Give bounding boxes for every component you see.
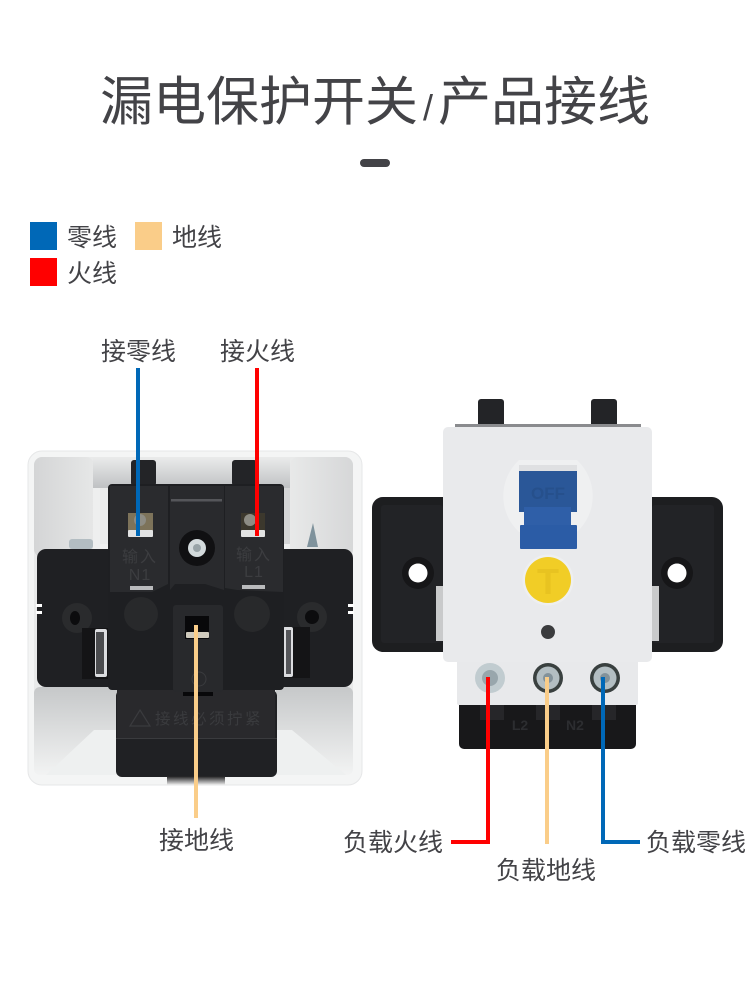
wire: load earth — [545, 677, 549, 844]
label: load earth: 负载地线 — [496, 857, 596, 885]
warning triangle — [130, 710, 150, 726]
label: connect live: 接火线 — [220, 338, 295, 366]
live input marking: 输入 — [236, 546, 272, 564]
lower black base — [459, 700, 636, 749]
bottom notch — [167, 776, 225, 785]
wire: load live — [451, 677, 488, 842]
black mounting plate — [372, 497, 723, 652]
small screw left — [69, 539, 93, 549]
screw 1 — [475, 663, 505, 693]
warning text on housing: 接线必须拧紧 — [155, 710, 263, 728]
terminal strip — [457, 658, 638, 705]
centre screw — [179, 530, 215, 566]
grey side tabs — [436, 586, 445, 641]
left mounting hole — [402, 557, 434, 589]
switch recess — [503, 460, 593, 532]
outer white plate — [28, 451, 362, 785]
lower terminal housing — [116, 690, 277, 777]
earth terminal block — [173, 605, 223, 692]
left device: socket back — [28, 451, 362, 785]
black mounting plate — [37, 549, 353, 687]
top tabs — [131, 460, 156, 486]
wire: neutral input — [136, 368, 140, 536]
neutral terminal — [128, 513, 153, 533]
base markings: L2 — [512, 717, 528, 733]
white front body — [443, 427, 652, 662]
label: connect earth: 接地线 — [159, 827, 234, 855]
title: 漏电保护开关 — [100, 73, 418, 132]
T marking: T — [537, 561, 559, 602]
side slots — [82, 628, 109, 679]
title: 产品接线 — [438, 73, 650, 132]
legend: live swatch — [30, 258, 57, 286]
legend: neutral swatch — [30, 222, 57, 250]
OFF marking: OFF — [531, 484, 565, 503]
neutral input marking: 输入 — [122, 548, 158, 566]
wire: live input — [255, 368, 259, 536]
small screw right — [307, 523, 318, 547]
title: / — [423, 87, 433, 128]
label: connect neutral: 接零线 — [101, 338, 176, 366]
indicator LED — [541, 625, 555, 639]
wire: load neutral — [603, 677, 640, 842]
title underline — [360, 159, 390, 167]
left device: socket back: N1 — [129, 567, 151, 584]
wire: earth input — [194, 625, 198, 818]
screw 2 — [533, 663, 563, 693]
centre cover — [170, 486, 224, 590]
label: load neutral: 负载零线 — [646, 829, 746, 857]
legend — [30, 222, 222, 288]
recessed inner tray — [34, 457, 353, 775]
label: load live: 负载火线 — [343, 829, 443, 857]
left device: socket back: L1 — [244, 564, 264, 581]
top tabs — [478, 399, 504, 431]
live terminal — [241, 513, 265, 533]
right device: leakage breaker — [372, 399, 723, 749]
blue toggle — [519, 471, 577, 549]
right mounting hole — [661, 557, 693, 589]
legend: neutral label: 零线 — [67, 224, 117, 252]
white clips behind the centre — [100, 488, 112, 544]
legend: live label: 火线 — [67, 260, 117, 288]
neutral terminal cover — [110, 486, 168, 592]
side mounting holes — [62, 603, 92, 633]
yellow test button — [522, 554, 574, 606]
live terminal cover — [225, 486, 283, 592]
central block — [108, 484, 284, 690]
metal strips — [130, 586, 153, 590]
legend: earth label: 地线 — [172, 224, 222, 252]
legend: earth swatch — [135, 222, 162, 250]
round knockouts — [124, 597, 158, 631]
right device: leakage breaker: N2 — [566, 717, 584, 733]
screw 3 — [590, 663, 620, 693]
